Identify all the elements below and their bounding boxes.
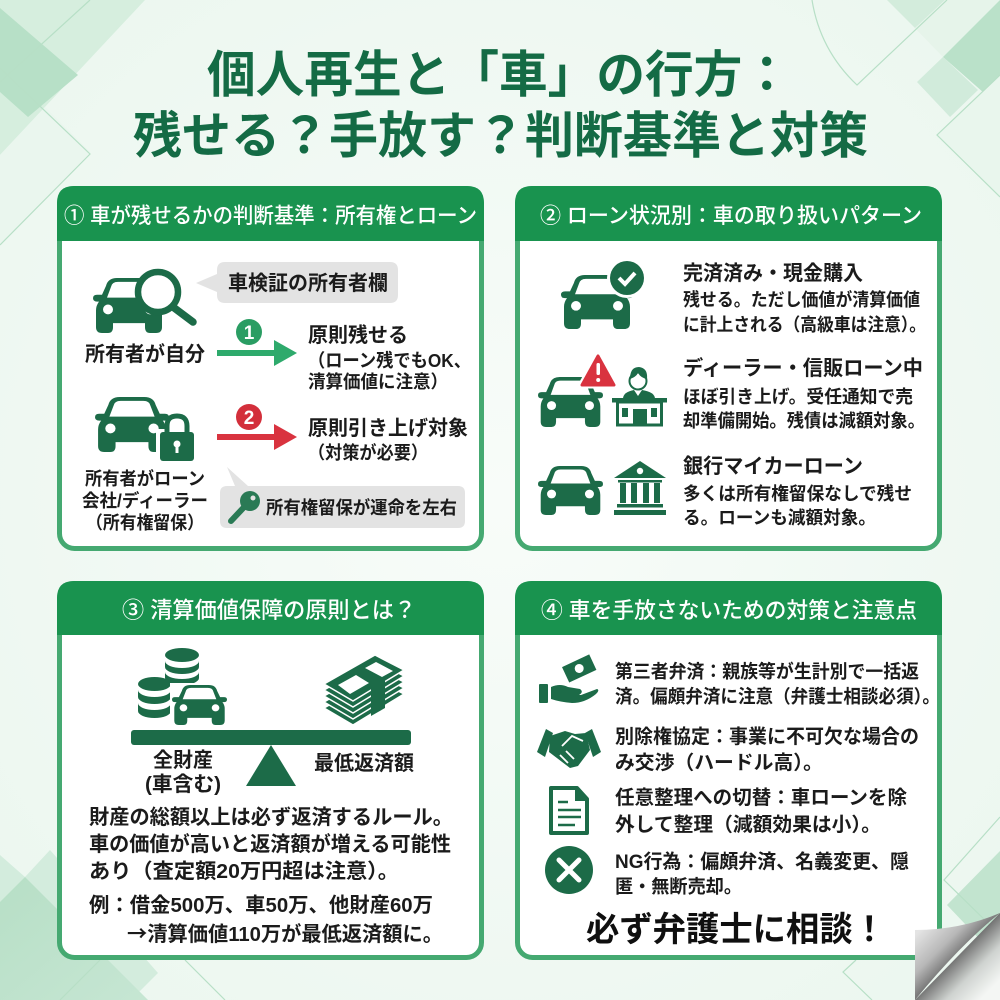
row 2 text: ほぼ引き上げ。受任通知で売 [683,386,913,407]
row 1 text [615,661,940,707]
row 2 text [683,356,925,431]
icon: hand with money [539,654,598,703]
panel 3: liquidation value principle [57,581,484,958]
label: minimum repayment: 最低返済額 [314,752,414,775]
icon: cash stack [324,655,404,725]
example text [89,894,443,947]
panel 3 header: ③ 清算価値保障の原則とは？ [122,598,416,623]
label: owner is self: 所有者が自分 [85,342,205,366]
arrow 1 [217,319,297,366]
callout: inspection certificate [196,262,398,303]
example text: 例：借金500万、車50万、他財産60万 [89,894,433,917]
row 2 text: み交渉（ハードル高）。 [615,751,823,774]
panel 1 header [57,186,484,241]
row 3 text [683,455,912,528]
arrow 2: 2 [244,408,254,429]
icon: key [231,491,260,521]
icon: car and bank [538,461,666,515]
callout: consult a lawyer: 必ず弁護士に相談！ [586,911,886,949]
row 1 text: 残せる。ただし価値が清算価値 [683,289,920,310]
panel 4 header [515,581,942,635]
arrow 1: 1 [244,323,255,344]
label: all assets [145,749,221,796]
row 3 text: る。ローンも減額対象。 [683,507,876,528]
example text: →清算価値110万が最低返済額に。 [127,917,443,947]
result 1 text: 原則残せる [308,323,408,347]
row 4 text [615,850,909,897]
title [133,47,868,164]
row 4 text: 匿・無断売却。 [615,876,742,897]
row 2 text [615,725,919,774]
explanation text: 財産の総額以上は必ず返済するルール。 [89,806,453,829]
row 3 text: 外して整理（減額効果は小）。 [615,813,881,836]
balance beam and fulcrum [131,730,411,786]
callout: retention of title [220,467,465,528]
row 3 text [615,787,907,836]
page curl [915,913,1000,1000]
title: 個人再生と「車」の行方： [207,47,791,103]
row 1 text: 第三者弁済：親族等が生計別で一括返 [615,661,919,682]
row 3 text: 多くは所有権留保なしで残せ [683,483,912,504]
row 2 text: ディーラー・信販ローン中 [683,356,923,380]
row 3 text: 任意整理への切替：車ローンを除 [615,787,907,809]
icon: coins and car [138,648,228,727]
panel 2 header [515,186,942,241]
result 1 text: （ローン残でもOK、 [308,350,471,371]
explanation text [89,806,453,883]
panel 1: ownership and loan [57,186,484,548]
panel 4: countermeasures [515,581,942,958]
row 3 text: 銀行マイカーローン [683,455,863,478]
icon: car with check [561,258,647,329]
label: owner is loan company [82,468,208,533]
result 2 text [308,416,468,463]
row 4 text: NG行為：偏頗弁済、名義変更、隠 [615,850,909,873]
result 1 text [308,323,471,392]
label: owner is loan company: 会社/ディーラー [82,490,208,511]
panel 4 header: ④ 車を手放さないための対策と注意点 [541,598,917,623]
label: owner is loan company: 所有者がローン [85,468,205,489]
icon: handshake [537,729,601,768]
row 1 text: に計上される（高級車は注意）。 [683,315,926,335]
row 2 text: 別除権協定：事業に不可欠な場合の [615,725,919,748]
title: 残せる？手放す？判断基準と対策 [133,108,868,164]
explanation text: 車の価値が高いと返済額が増える可能性 [89,832,451,856]
result 2 text: 原則引き上げ対象 [308,416,468,440]
icon: car warning and dealer [538,354,667,427]
callout: retention of title: 所有権留保が運命を左右 [266,497,457,518]
icon: document [551,788,587,833]
row 1 text [683,262,926,335]
panel 3 header [57,581,484,635]
panel 1 header: ① 車が残せるかの判断基準：所有権とローン [64,203,477,228]
icon: prohibited cross [545,846,593,894]
arrow 2 [217,404,297,450]
panel 2: handling by loan status [515,186,942,548]
panel 2 header: ② ローン状況別：車の取り扱いパターン [540,204,922,228]
icon: car with lock [95,397,198,465]
result 2 text: （対策が必要） [308,442,428,463]
row 2 text: 却準備開始。残債は減額対象。 [683,410,925,431]
label: all assets: 全財産 [153,749,213,772]
label: all assets: (車含む) [145,773,221,796]
row 1 text: 済。偏頗弁済に注意（弁護士相談必須）。 [615,686,940,707]
row 1 text: 完済済み・現金購入 [683,262,863,285]
label: owner is loan company: （所有権留保） [86,513,204,533]
result 1 text: 清算価値に注意） [308,371,448,392]
icon: car with magnifier [93,272,193,333]
explanation text: あり（査定額20万円超は注意）。 [89,860,399,883]
callout: inspection certificate: 車検証の所有者欄 [228,272,388,295]
